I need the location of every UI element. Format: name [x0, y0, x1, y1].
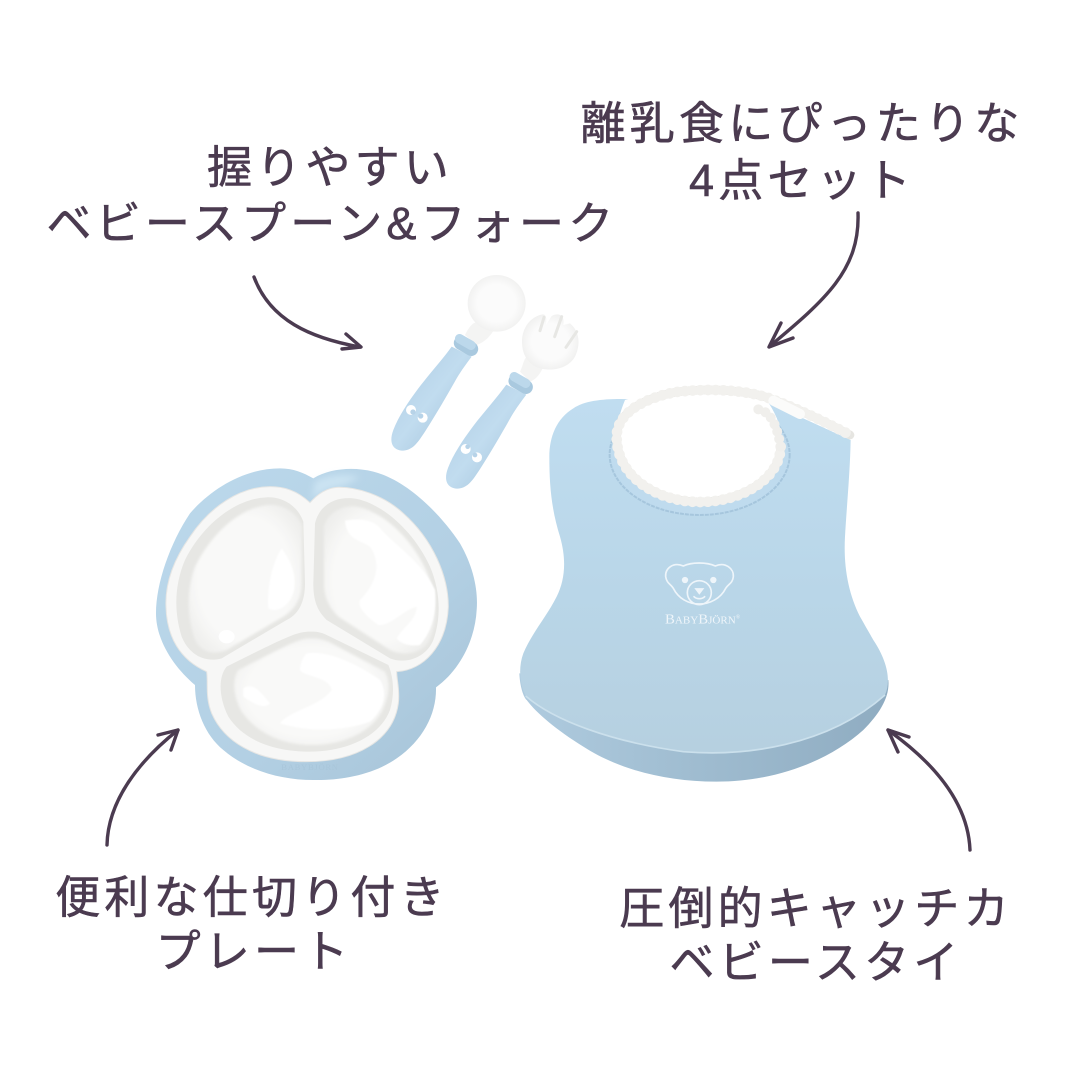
spoon handle — [391, 332, 481, 451]
fork — [446, 314, 579, 489]
plate light notch — [312, 475, 360, 500]
bear logo — [666, 563, 733, 605]
spoon bowl — [465, 275, 526, 345]
spoon — [391, 275, 526, 451]
neck hole — [616, 378, 782, 505]
heading: spoon and fork: ベビースプーン&フォーク — [47, 198, 617, 249]
bib neck scallop — [610, 394, 790, 515]
bottom compartment — [221, 632, 393, 752]
bib lower pocket band — [519, 673, 889, 782]
bib brand name: ® — [736, 613, 740, 620]
heading: four piece set: 4点セット — [689, 155, 915, 206]
fork handle — [446, 370, 535, 489]
bib pocket lip — [526, 695, 885, 753]
heading: spoon and fork: 握りやすい — [207, 142, 453, 193]
heading: four piece set: 離乳食にぴったりな — [581, 98, 1023, 149]
heading: catch bib — [619, 883, 1013, 988]
heading: divided plate — [55, 872, 449, 977]
heading: divided plate: プレート — [156, 926, 352, 977]
plate — [156, 468, 477, 780]
plate white rim — [166, 487, 448, 762]
plate blue base — [156, 468, 477, 780]
arrow: to bib pocket — [888, 730, 970, 850]
spoon eyes — [406, 405, 428, 423]
plate embossed brand: BABYBJÖRN — [281, 762, 339, 772]
heading: divided plate: 便利な仕切り付き — [55, 872, 449, 923]
arrow: to spoon and fork — [254, 277, 361, 349]
fork eyes — [461, 444, 482, 462]
heading: spoon and fork — [47, 142, 617, 249]
fork head — [520, 314, 579, 382]
heading: four piece set — [581, 98, 1023, 206]
arrow: to bib from set heading — [769, 213, 858, 347]
bib — [519, 378, 889, 782]
bib body — [520, 399, 888, 753]
neck rope beads — [617, 390, 850, 502]
arrow: to plate — [107, 730, 178, 845]
heading: catch bib: 圧倒的キャッチカ — [619, 883, 1013, 934]
bib brand name: BABYBJÖRN — [665, 612, 733, 627]
left compartment — [176, 497, 305, 660]
right compartment — [313, 498, 439, 661]
heading: catch bib: ベビースタイ — [670, 937, 962, 988]
